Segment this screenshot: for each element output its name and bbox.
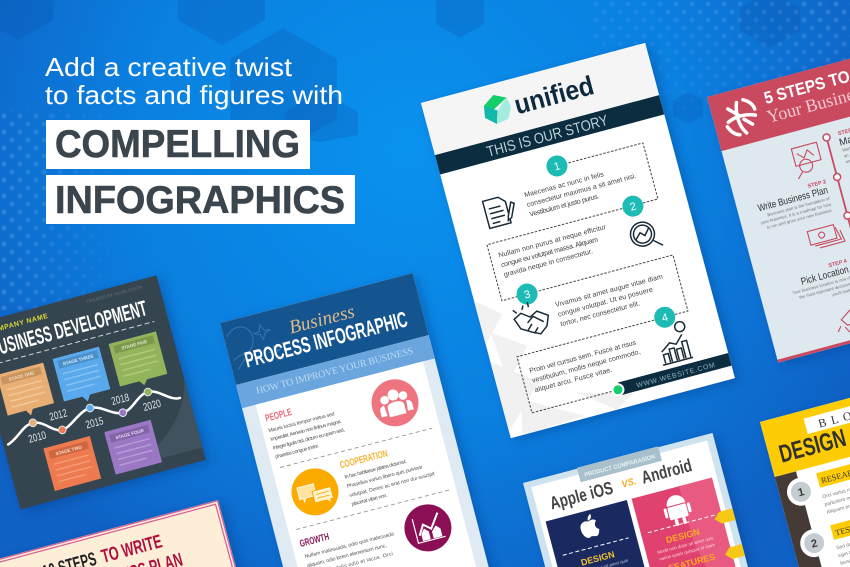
grey facets (474, 267, 636, 438)
timeline nodes (28, 387, 156, 441)
number badges: 2 (629, 201, 638, 214)
step 4: STEP 4 (828, 258, 848, 269)
years: 2015 (84, 415, 105, 431)
stage five: STAGE FIVE (121, 339, 148, 351)
icon: magnifier (628, 218, 663, 253)
heading: intro text (45, 52, 343, 110)
step two (797, 509, 850, 567)
number badges: 3 (523, 288, 532, 302)
header decoration (225, 318, 283, 371)
section: growth (298, 499, 458, 567)
plan title: TO WRITE (99, 531, 165, 567)
step texts: aliquet arcu. Fusce vitae. (534, 367, 613, 394)
section: people: PEOPLE (264, 407, 293, 424)
stage four (104, 420, 162, 475)
years (23, 383, 163, 447)
stage one: STAGE ONE (8, 370, 35, 382)
section: people: Mauris luctus tempor metus sed (268, 411, 335, 434)
stage three: STAGE THREE (62, 353, 94, 366)
years: 2010 (27, 430, 48, 446)
subtitle: HOW TO IMPROVE YOUR BUSINESS (255, 346, 415, 397)
step 4 (787, 258, 850, 307)
step texts: gravida neque in consectetur. (503, 248, 594, 279)
tag: PRODUCT COMPARASION (584, 453, 657, 479)
title: Apple iOS (548, 478, 615, 513)
panel: unified story (421, 43, 735, 438)
step texts: vestibulum, mollis neque commodo, (531, 349, 641, 385)
panel: five steps (707, 30, 850, 363)
timeline curve (4, 384, 180, 444)
step texts: Vestibulum et justo purus. (529, 193, 600, 219)
logo: unified (511, 70, 597, 120)
step one (784, 458, 850, 524)
step 2: your business. It is a roadmap for how (760, 201, 832, 225)
section: cooperation: Phasellus varius libero quis pulvinar (346, 464, 424, 490)
section: cooperation: volutpat. Donec ac erat non dui suscipit (349, 471, 436, 499)
panel: process infographic (220, 273, 517, 567)
section: people: Integer ligula nisi, dictum eu quam sed, (272, 427, 346, 452)
number badges: 4 (660, 312, 670, 325)
years: 2012 (48, 407, 69, 424)
logo (480, 69, 597, 129)
tag (577, 446, 662, 482)
step 1 (836, 112, 850, 165)
step texts: consectetur maximus a sit amet nisi. (526, 173, 637, 209)
section: growth: Nullam malesuada, odio quis malesuada (304, 531, 395, 560)
timeline (822, 133, 850, 303)
yellow tabs (546, 508, 745, 567)
step texts: congue volutpat. Ut eu posuere (557, 286, 654, 319)
icon: money (807, 223, 845, 250)
column: apple (546, 500, 683, 567)
column: android: DESIGN (665, 527, 701, 545)
step texts: Maecenas ac nunc in felis (524, 171, 605, 199)
title (547, 455, 694, 513)
section: people (264, 374, 424, 460)
step 2: Write Business Plan (757, 185, 829, 214)
panel: blog design (760, 360, 850, 567)
main title: PROCESS INFOGRAPHIC (242, 306, 410, 372)
stage one (0, 363, 56, 421)
band title: THIS IS OUR STORY (485, 112, 610, 161)
step 2: STEP 2 (807, 179, 827, 190)
title: Android (639, 455, 694, 488)
step 2: to run and grow your new business. (766, 207, 833, 230)
years: 2018 (110, 392, 131, 408)
step texts: Vivamus sit amet augue vitae diam (555, 273, 664, 309)
panel: business development (0, 275, 206, 509)
icon: research (790, 142, 824, 179)
years: 2020 (142, 398, 162, 414)
step texts (485, 163, 684, 394)
panel: business plan (0, 500, 270, 567)
dashed path (472, 143, 703, 413)
credit: CREATED BY: KEVIN COSTA (86, 285, 143, 304)
section: cooperation (286, 438, 438, 522)
stage two (43, 436, 101, 491)
blog tag (804, 382, 850, 434)
icon: megaphone (832, 303, 850, 335)
footer band (618, 353, 732, 395)
stage two: STAGE TWO (55, 444, 83, 456)
number badges: 1 (553, 160, 562, 174)
icon: growth chart (653, 321, 693, 365)
script title: Business (287, 301, 357, 338)
logo (722, 97, 760, 137)
heading: intro text: Add a creative twist (45, 52, 293, 82)
title: VS. (620, 476, 638, 491)
footer band: WWW.WEBSITE.COM (636, 362, 716, 390)
step one: 1 (797, 486, 806, 499)
stage four: STAGE FOUR (115, 428, 145, 440)
heading: compelling infographics: INFOGRAPHICS (55, 179, 345, 222)
band (435, 95, 664, 174)
heading: compelling infographics: COMPELLING (55, 123, 300, 166)
step texts: tortor, nec consectetur elit. (560, 300, 641, 328)
icon: document (483, 194, 519, 228)
step texts: Proin vel cursus sem. Fusce at risus (529, 340, 637, 375)
heading: compelling infographics (46, 120, 355, 224)
step 4: Your business location is one of (792, 275, 850, 295)
end dot (611, 383, 625, 397)
section: cooperation: COOPERATION (339, 448, 389, 471)
number badges (484, 136, 678, 363)
step 2 (754, 179, 834, 231)
section: people: imperdiet. Aenean non finibus magna. (270, 419, 342, 443)
plan title (40, 527, 185, 567)
section: people: pharetra congue tortor. (275, 443, 320, 460)
column: android (632, 478, 768, 567)
panel: product comparison (523, 432, 780, 567)
step two: 2 (810, 537, 819, 551)
section: cooperation: In hac habitasse platea dictumst. (344, 459, 407, 481)
heading: intro text: to facts and figures with (45, 80, 343, 110)
step texts: Nullam non purus at neque efficitur (498, 224, 608, 259)
column: android: Morbi non dolor sit amet quis (657, 535, 715, 555)
section: growth: GROWTH (299, 532, 330, 550)
column: android: varius quam quisque id diam (659, 542, 716, 562)
icon: handshake (511, 298, 552, 340)
section: cooperation: placerat vitae non. (351, 493, 388, 508)
stage three (53, 347, 112, 407)
stage five (109, 331, 169, 391)
step texts: congue eu volutpat massa. Aliquam (500, 236, 599, 269)
step 2: Business plan is the foundation of (767, 196, 831, 217)
